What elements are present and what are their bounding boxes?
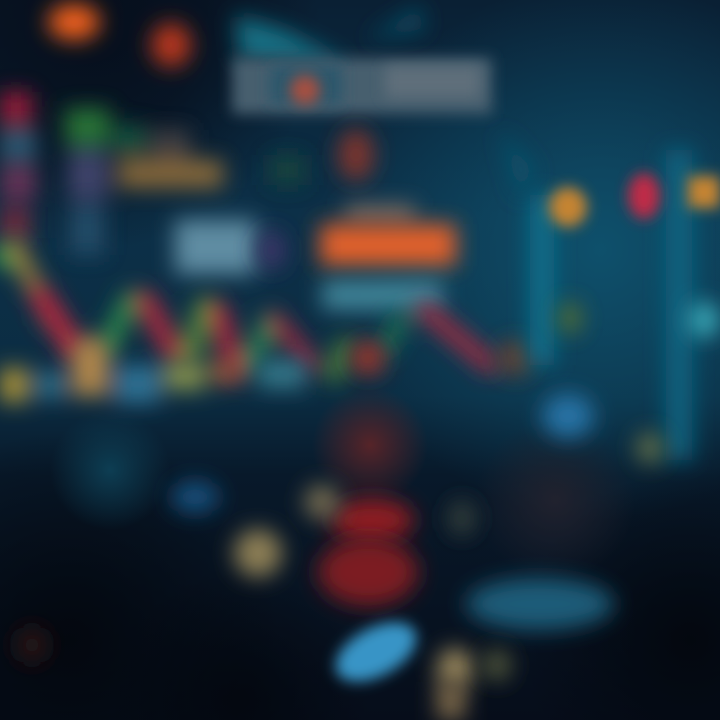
chart base blocks [0,340,533,403]
lower scene [16,481,614,720]
left column bars [0,92,305,255]
top orange lights [48,4,191,67]
heading panel [232,5,492,181]
center panels [175,205,456,310]
zigzag line chart [0,245,490,375]
right side lights and pillars [500,130,720,464]
